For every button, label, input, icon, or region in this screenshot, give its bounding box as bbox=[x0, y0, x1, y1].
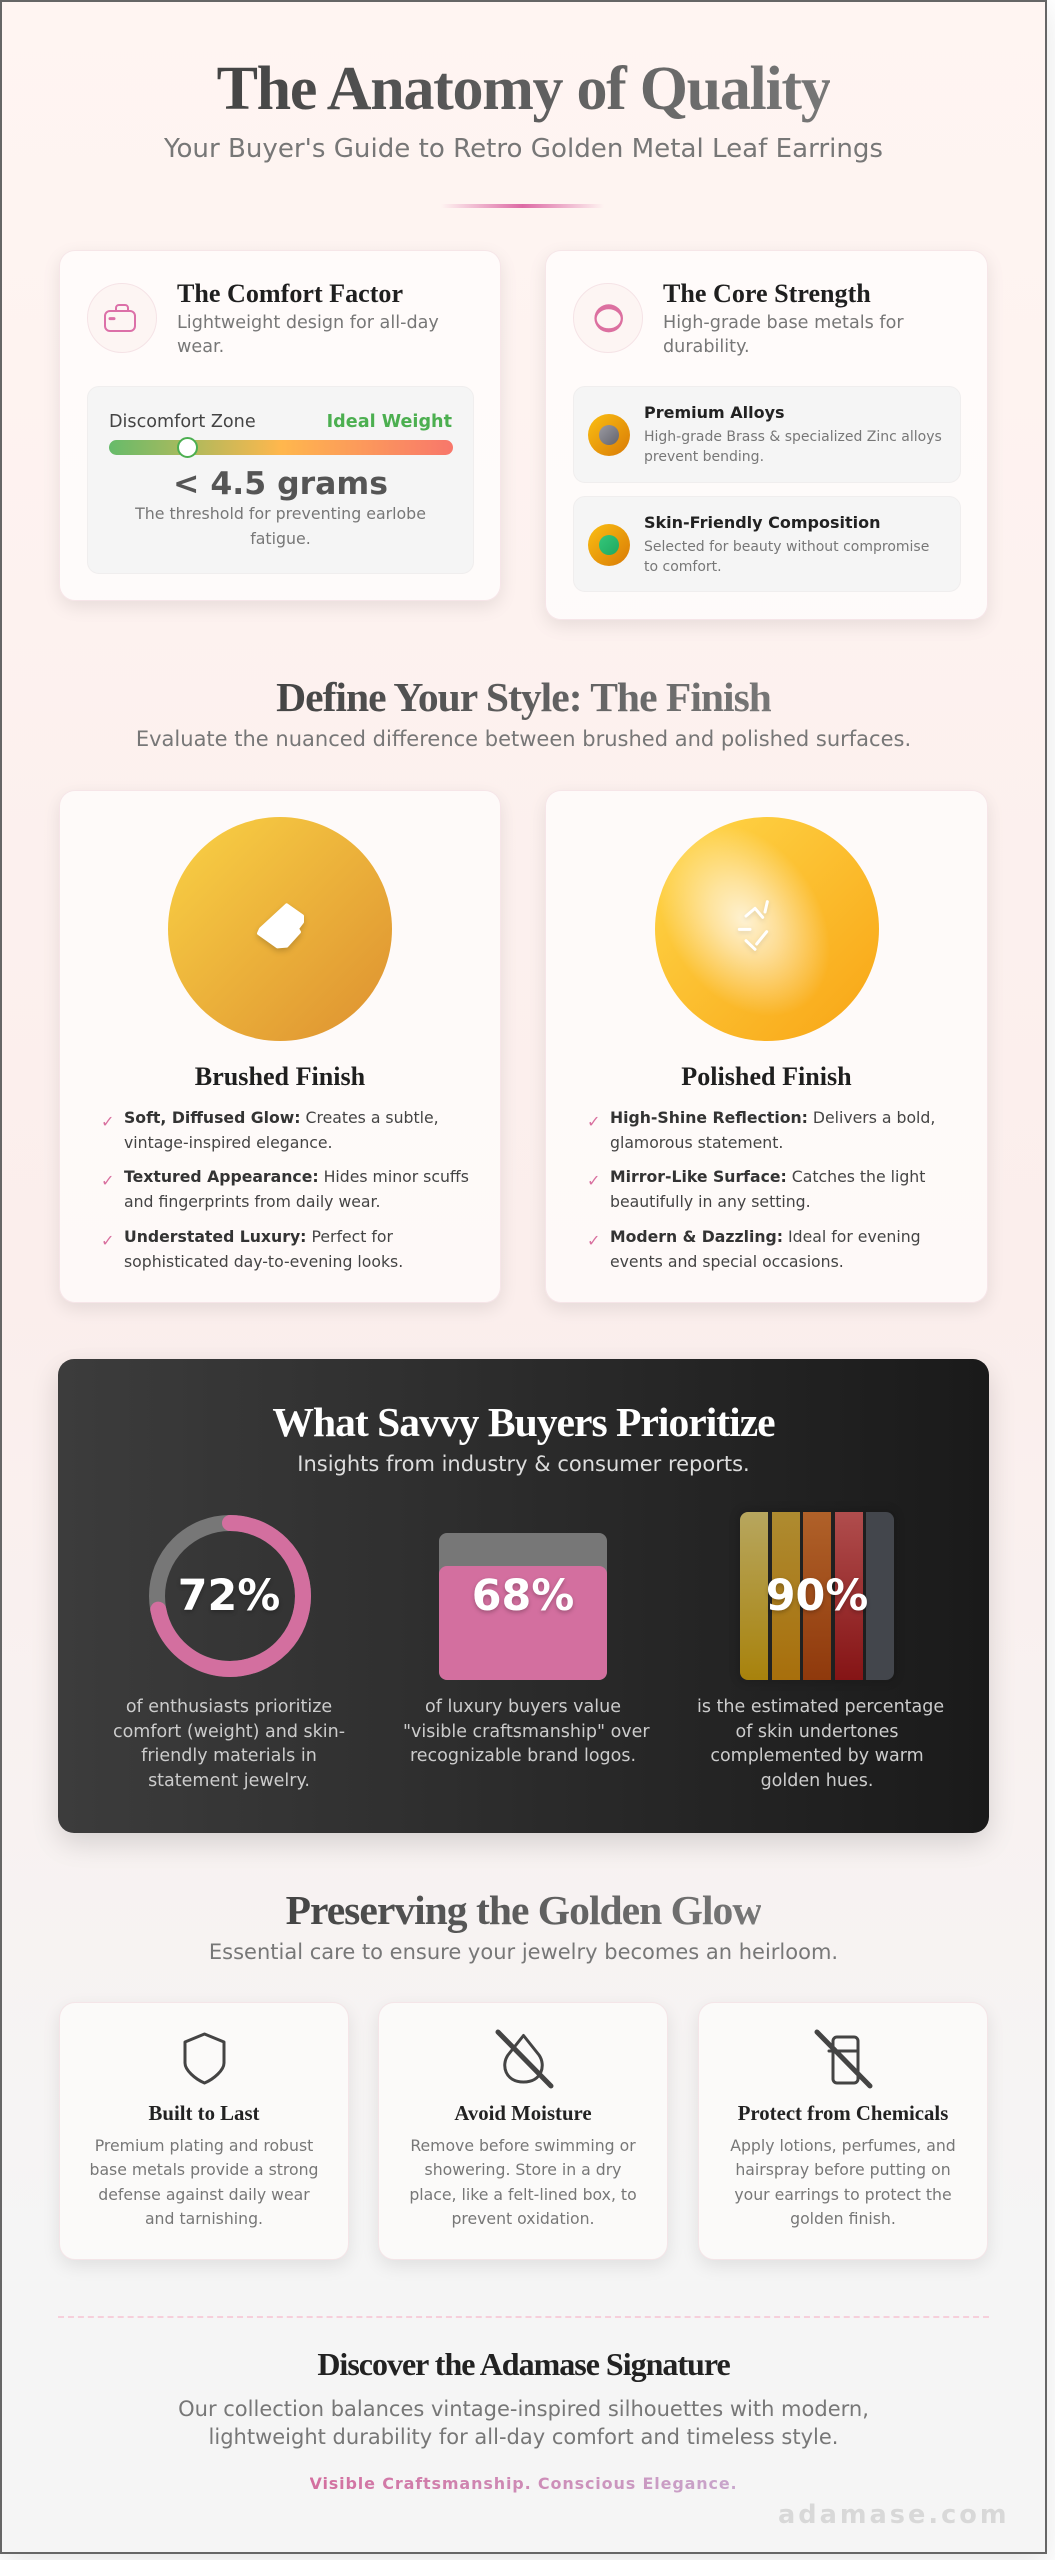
heading: Built to Last bbox=[149, 2102, 259, 2125]
check: ✓ bbox=[101, 1171, 114, 1190]
item text bbox=[644, 429, 942, 465]
bullet: glamorous statement. bbox=[610, 1132, 783, 1152]
footer text: Our collection balances vintage-inspired silhouettes with modern, bbox=[178, 2397, 869, 2421]
stat text: of luxury buyers value bbox=[425, 1697, 621, 1717]
bullet bbox=[610, 1167, 926, 1210]
bullet list bbox=[101, 1108, 469, 1270]
title: The Anatomy of Quality bbox=[217, 55, 830, 123]
heading: Avoid Moisture bbox=[454, 2102, 592, 2125]
text: Apply lotions, perfumes, and bbox=[730, 2136, 956, 2155]
watermark: adamase.com bbox=[778, 2500, 1010, 2530]
panel: built to last bbox=[59, 2002, 349, 2260]
check: ✓ bbox=[587, 1231, 600, 1250]
header bbox=[164, 55, 883, 208]
heading: Protect from Chemicals bbox=[738, 2102, 948, 2125]
text: golden finish. bbox=[790, 2209, 896, 2228]
stat text: recognizable brand logos. bbox=[410, 1746, 636, 1766]
item text: to comfort. bbox=[644, 559, 722, 575]
weight scale box bbox=[87, 386, 474, 574]
item: premium alloys bbox=[573, 386, 961, 483]
footer bbox=[178, 2346, 869, 2493]
stat text: of skin undertones bbox=[736, 1722, 898, 1742]
value: 90%: 90% bbox=[766, 1571, 868, 1621]
stat text bbox=[403, 1697, 650, 1766]
text: defense against daily wear bbox=[98, 2185, 310, 2204]
bullet bbox=[124, 1108, 439, 1152]
icon: brushed swatch bbox=[256, 903, 306, 954]
text: place, like a felt-lined box, to bbox=[409, 2185, 637, 2204]
subheading: Essential care to ensure your jewelry becomes an heirloom. bbox=[209, 1940, 838, 1964]
subtitle: Your Buyer's Guide to Retro Golden Metal Leaf Earrings bbox=[164, 134, 883, 164]
header divider bbox=[441, 204, 604, 208]
bullet: High-Shine Reflection: Delivers a bold, bbox=[610, 1108, 935, 1127]
bullet bbox=[124, 1167, 469, 1210]
bullet: and fingerprints from daily wear. bbox=[124, 1192, 381, 1210]
section heading: care bbox=[209, 1887, 838, 1964]
polished gold disc bbox=[655, 817, 879, 1041]
chart: 68% bar bbox=[439, 1533, 607, 1680]
icon: polished sparkle bbox=[738, 900, 769, 952]
subheading: Evaluate the nuanced difference between brushed and polished surfaces. bbox=[136, 727, 911, 751]
item text bbox=[644, 539, 929, 575]
chart: skin undertone swatches bbox=[740, 1512, 894, 1680]
icon: alloy disc bbox=[588, 414, 630, 456]
text: prevent oxidation. bbox=[451, 2209, 595, 2228]
bullet: Understated Luxury: Perfect for bbox=[124, 1227, 393, 1246]
threshold note: The threshold for preventing earlobe bbox=[135, 504, 426, 523]
heading: Brushed Finish bbox=[195, 1062, 365, 1091]
footer text bbox=[178, 2397, 869, 2449]
bullet: events and special occasions. bbox=[610, 1252, 844, 1270]
brushed gold disc bbox=[168, 817, 392, 1041]
threshold note: fatigue. bbox=[250, 528, 311, 548]
bullet bbox=[610, 1227, 921, 1270]
stat text: complemented by warm bbox=[710, 1746, 924, 1766]
footer heading: Discover the Adamase Signature bbox=[317, 2346, 730, 2382]
heading: Preserving the Golden Glow bbox=[286, 1887, 761, 1933]
text: your earrings to protect the bbox=[734, 2185, 952, 2204]
check: ✓ bbox=[101, 1231, 114, 1250]
text: Premium plating and robust bbox=[95, 2136, 313, 2155]
bullet: Mirror-Like Surface: Catches the light bbox=[610, 1167, 925, 1186]
item title: Premium Alloys bbox=[644, 403, 785, 422]
bullet: beautifully in any setting. bbox=[610, 1192, 811, 1210]
stat text: statement jewelry. bbox=[148, 1770, 310, 1790]
bullet: sophisticated day-to-evening looks. bbox=[124, 1252, 403, 1270]
panel: comfort factor bbox=[59, 250, 501, 601]
description: Lightweight design for all-day bbox=[177, 313, 439, 333]
item text: Selected for beauty without compromise bbox=[644, 539, 929, 555]
label: discomfort zone: Discomfort Zone bbox=[109, 412, 256, 432]
icon: ring bbox=[573, 283, 643, 353]
panel: core strength bbox=[545, 250, 988, 620]
icon: shield bbox=[184, 2032, 226, 2084]
tagline: Visible Craftsmanship. Conscious Elegance. bbox=[310, 2474, 738, 2493]
description bbox=[177, 313, 439, 357]
bullet: Textured Appearance: Hides minor scuffs bbox=[124, 1167, 469, 1186]
item title: Skin-Friendly Composition bbox=[644, 513, 881, 532]
big value: < 4.5 grams bbox=[173, 466, 388, 502]
panel: protect from chemicals bbox=[698, 2002, 988, 2260]
check: ✓ bbox=[101, 1112, 114, 1131]
item: skin-friendly composition bbox=[573, 496, 961, 592]
stat text bbox=[113, 1697, 345, 1790]
weight marker bbox=[177, 437, 198, 458]
bullet list bbox=[587, 1108, 935, 1270]
description: High-grade base metals for bbox=[663, 313, 904, 333]
chart: 72% donut bbox=[149, 1515, 311, 1677]
panel: buyer statistics bbox=[58, 1359, 989, 1833]
text: showering. Store in a dry bbox=[425, 2160, 621, 2179]
panel: avoid moisture bbox=[378, 2002, 668, 2260]
text: and tarnishing. bbox=[145, 2209, 263, 2228]
text: base metals provide a strong bbox=[89, 2160, 319, 2179]
section heading: finish bbox=[136, 674, 911, 751]
description: durability. bbox=[663, 337, 750, 357]
icon: skin-friendly disc bbox=[588, 524, 630, 566]
bullet bbox=[124, 1227, 403, 1270]
check: ✓ bbox=[587, 1112, 600, 1131]
text bbox=[409, 2136, 637, 2228]
bullet: Soft, Diffused Glow: Creates a subtle, bbox=[124, 1108, 439, 1127]
stat text: of enthusiasts prioritize bbox=[126, 1697, 332, 1717]
item text: High-grade Brass & specialized Zinc alloys bbox=[644, 429, 942, 445]
weight gradient bar bbox=[109, 440, 453, 455]
heading: The Comfort Factor bbox=[177, 279, 403, 308]
item text: prevent bending. bbox=[644, 449, 764, 465]
stat text: golden hues. bbox=[761, 1770, 873, 1790]
heading: The Core Strength bbox=[663, 279, 871, 308]
bullet bbox=[610, 1108, 935, 1152]
heading: Polished Finish bbox=[681, 1062, 852, 1091]
check: ✓ bbox=[587, 1171, 600, 1190]
text: hairspray before putting on bbox=[735, 2160, 951, 2179]
bullet: vintage-inspired elegance. bbox=[124, 1132, 333, 1152]
value: 72%: 72% bbox=[178, 1571, 280, 1621]
subheading: Insights from industry & consumer reports. bbox=[297, 1452, 750, 1476]
text bbox=[89, 2136, 319, 2228]
label: ideal weight: Ideal Weight bbox=[327, 412, 452, 432]
description bbox=[663, 313, 904, 357]
value: 68%: 68% bbox=[472, 1571, 574, 1621]
stat text: comfort (weight) and skin- bbox=[113, 1722, 345, 1742]
stat text: friendly materials in bbox=[141, 1746, 317, 1766]
threshold note bbox=[135, 504, 426, 548]
heading: Define Your Style: The Finish bbox=[276, 674, 771, 720]
panel: polished finish bbox=[545, 790, 988, 1303]
stat text: "visible craftsmanship" over bbox=[403, 1722, 650, 1742]
text: Remove before swimming or bbox=[410, 2136, 636, 2155]
panel: brushed finish bbox=[59, 790, 501, 1303]
stat text: is the estimated percentage bbox=[697, 1697, 944, 1717]
stat text bbox=[697, 1697, 944, 1790]
icon: bag bbox=[87, 283, 157, 353]
description: wear. bbox=[177, 337, 224, 357]
footer text: lightweight durability for all-day comfort and timeless style. bbox=[209, 2425, 838, 2449]
icon: crossed-out drop bbox=[496, 2030, 554, 2088]
text bbox=[730, 2136, 956, 2228]
icon: crossed-out bottle bbox=[814, 2030, 872, 2088]
bullet: Modern & Dazzling: Ideal for evening bbox=[610, 1227, 921, 1246]
heading: What Savvy Buyers Prioritize bbox=[272, 1399, 775, 1445]
